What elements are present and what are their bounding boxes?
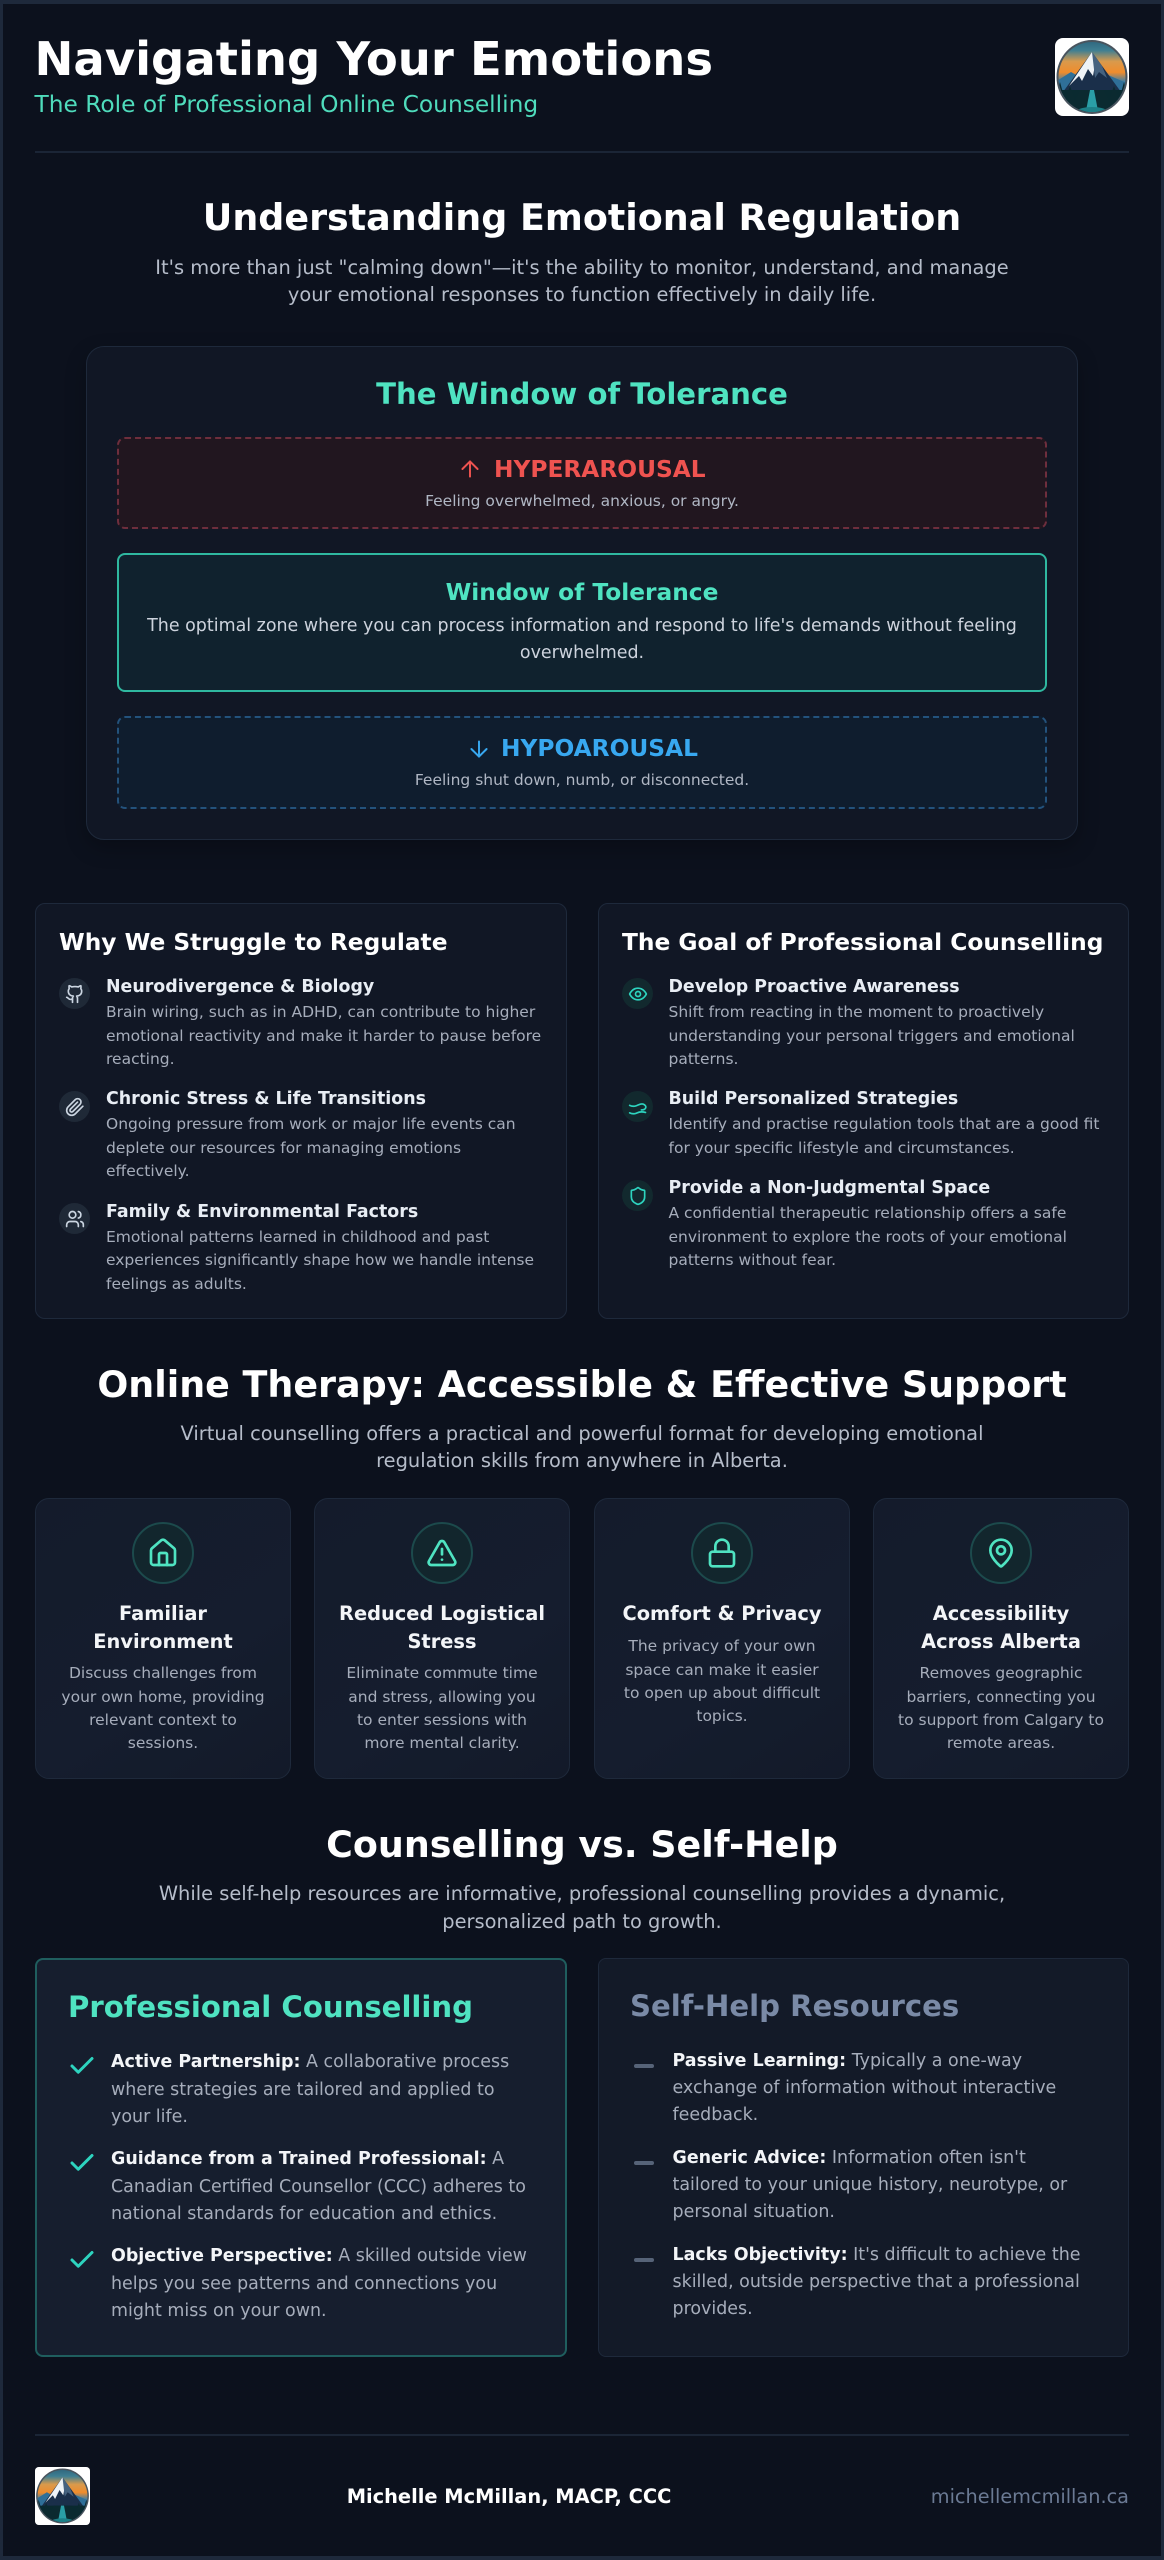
list item: trained professional	[111, 2149, 526, 2224]
card: familiar environment	[35, 1498, 291, 1779]
list item: lacks objectivity: provides.	[672, 2299, 753, 2319]
list item: active partnership	[111, 2052, 509, 2127]
list item: passive learning	[672, 2051, 1056, 2125]
list item: trained professional: Guidance from a Trained Professional: A	[111, 2149, 504, 2169]
item text: neurodivergence	[106, 1003, 541, 1068]
card text: comfort and privacy: space can make it easier	[625, 1661, 819, 1679]
item text: proactive awareness: understanding your personal triggers and emotional	[668, 1027, 1075, 1045]
footer: website: michellemcmillan.ca	[931, 2485, 1129, 2508]
text: comparison intro: personalized path to growth.	[442, 1910, 722, 1933]
heading: professional counselling: Professional Counselling	[68, 1990, 473, 2024]
card text: familiar environment: your own home, providing	[61, 1688, 265, 1706]
text: regulation intro: It's more than just "calming down"—it's the ability to monitor, understand, and manage	[155, 256, 1009, 278]
list item: passive learning: exchange of information without interactive	[672, 2078, 1056, 2098]
list item: generic advice: personal situation.	[672, 2202, 835, 2222]
card text: reduced logistical stress: and stress, allowing you	[348, 1688, 536, 1706]
card text: reduced logistical stress: Eliminate commute time	[346, 1664, 538, 1682]
item text: neurodivergence: Brain wiring, such as in ADHD, can contribute to higher	[106, 1003, 535, 1021]
zone: window of tolerance	[117, 553, 1047, 692]
text: regulation intro: your emotional responses to function effectively in daily life.	[288, 283, 876, 306]
list item: passive learning: Passive Learning: Typically a one-way	[672, 2051, 1022, 2071]
card: comfort and privacy	[594, 1498, 850, 1779]
icon: dash 2	[634, 2160, 654, 2164]
panel: goal of professional counselling	[598, 903, 1129, 1319]
icon: arrow down	[470, 740, 488, 758]
icon: dash 3	[634, 2258, 654, 2262]
item title: family factors: Family & Environmental Factors	[106, 1202, 418, 1222]
list item: lacks objectivity: skilled, outside perspective that a professional	[672, 2272, 1080, 2292]
panel: professional counselling	[35, 1958, 567, 2357]
text: window description	[147, 616, 1017, 663]
item text: non-judgmental space: patterns without fear.	[668, 1251, 836, 1269]
card text: familiar environment: Discuss challenges from	[69, 1664, 257, 1682]
card text: comfort and privacy: to open up about difficult	[624, 1684, 820, 1702]
card text: comfort and privacy: The privacy of your own	[628, 1637, 816, 1655]
item text: non-judgmental space: A confidential therapeutic relationship offers a safe	[668, 1204, 1066, 1222]
card title: familiar environment: Familiar	[119, 1602, 207, 1625]
item text: proactive awareness: patterns.	[668, 1050, 738, 1068]
card text: familiar environment: relevant context to	[89, 1711, 237, 1729]
list item: objective perspective: helps you see patterns and connections you	[111, 2274, 497, 2294]
list item: objective perspective: Objective Perspective: A skilled outside view	[111, 2246, 527, 2266]
list item: objective perspective	[111, 2246, 527, 2321]
item text: personalized strategies	[668, 1115, 1100, 1157]
card: reduced logistical stress	[314, 1498, 570, 1779]
text: regulation intro	[155, 256, 1009, 306]
list item: trained professional: Canadian Certified Counsellor (CCC) adheres to	[111, 2177, 526, 2197]
text: online therapy intro	[180, 1422, 983, 1472]
icon: waves	[622, 1091, 653, 1122]
list item: trained professional: national standards for education and ethics.	[111, 2204, 497, 2224]
item title: personalized strategies: Build Personalized Strategies	[668, 1089, 958, 1109]
list item: active partnership: where strategies are tailored and applied to	[111, 2080, 495, 2100]
card text: familiar environment	[61, 1664, 265, 1752]
item text: neurodivergence: reacting.	[106, 1050, 175, 1068]
icon: paperclip	[59, 1091, 90, 1122]
icon: alert triangle	[411, 1522, 473, 1584]
card title: reduced logistical stress: Reduced Logistical	[339, 1602, 545, 1625]
card title: reduced logistical stress	[339, 1602, 545, 1653]
card text: reduced logistical stress: to enter sessions with	[357, 1711, 527, 1729]
heading: self-help resources: Self-Help Resources	[630, 1989, 959, 2023]
text: window description: The optimal zone where you can process information and respond to life's demands without feeling	[147, 616, 1017, 636]
list item: lacks objectivity: Lacks Objectivity: It's difficult to achieve the	[672, 2245, 1080, 2265]
card title: comfort and privacy: Comfort & Privacy	[622, 1602, 822, 1625]
item text: family factors: feelings as adults.	[106, 1275, 247, 1293]
icon: arrow up	[461, 460, 479, 478]
heading: counselling vs self-help: Counselling vs. Self-Help	[326, 1822, 838, 1866]
panel: why we struggle	[35, 903, 567, 1319]
heading: understanding emotional regulation: Understanding Emotional Regulation	[203, 196, 961, 239]
card text: comfort and privacy: topics.	[696, 1707, 748, 1725]
card title: accessibility across alberta: Accessibility	[933, 1602, 1069, 1625]
item text: neurodivergence: emotional reactivity and make it harder to pause before	[106, 1027, 541, 1045]
item text: non-judgmental space: environment to explore the roots of your emotional	[668, 1228, 1067, 1246]
text: hypoarousal description: Feeling shut down, numb, or disconnected.	[415, 771, 749, 789]
heading: the window of tolerance: The Window of Tolerance	[376, 377, 788, 411]
text: online therapy intro: regulation skills from anywhere in Alberta.	[376, 1449, 788, 1472]
item title: neurodivergence: Neurodivergence & Biology	[106, 977, 374, 997]
card title: familiar environment	[93, 1602, 233, 1653]
card text: accessibility across alberta: to support from Calgary to	[898, 1711, 1104, 1729]
card text: accessibility across alberta	[898, 1664, 1104, 1752]
item text: non-judgmental space	[668, 1204, 1067, 1269]
icon: mountain logo	[1055, 38, 1129, 116]
list item: generic advice: tailored to your unique history, neurotype, or	[672, 2175, 1067, 2195]
item text: chronic stress: effectively.	[106, 1162, 190, 1180]
text: hyperarousal description: Feeling overwhelmed, anxious, or angry.	[425, 492, 739, 510]
heading: why we struggle: Why We Struggle to Regulate	[59, 929, 448, 956]
list item: active partnership: Active Partnership: A collaborative process	[111, 2052, 509, 2072]
list item: lacks objectivity	[672, 2245, 1080, 2319]
list item: active partnership: your life.	[111, 2107, 188, 2127]
panel: window of tolerance	[86, 346, 1078, 840]
icon: map pin	[970, 1522, 1032, 1584]
icon: footer logo	[35, 2467, 90, 2525]
panel: self-help resources	[598, 1958, 1129, 2357]
item title: chronic stress: Chronic Stress & Life Transitions	[106, 1089, 426, 1109]
card text: accessibility across alberta: Removes geographic	[920, 1664, 1082, 1682]
icon: eye	[622, 978, 653, 1009]
item text: family factors: experiences significantly shape how we handle intense	[106, 1251, 534, 1269]
icon: dash 1	[634, 2064, 654, 2068]
icon: check 1	[70, 2056, 94, 2074]
heading: goal of counselling: The Goal of Professional Counselling	[622, 929, 1103, 956]
zone: hypoarousal	[117, 716, 1047, 809]
card title: reduced logistical stress: Stress	[407, 1630, 477, 1653]
icon: check 3	[70, 2250, 94, 2268]
text: comparison intro: While self-help resources are informative, professional counselling provides a dynamic,	[159, 1882, 1005, 1905]
list item: objective perspective: might miss on your own.	[111, 2301, 327, 2321]
item text: chronic stress	[106, 1115, 516, 1180]
text: online therapy intro: Virtual counselling offers a practical and powerful format for developing emotional	[181, 1422, 983, 1445]
label: hyperarousal: HYPERAROUSAL	[494, 456, 706, 483]
zone: hyperarousal	[117, 437, 1047, 529]
heading: online therapy: Online Therapy: Accessible & Effective Support	[97, 1362, 1067, 1406]
card: accessibility across alberta	[873, 1498, 1129, 1779]
card text: accessibility across alberta: barriers, connecting you	[906, 1688, 1096, 1706]
card title: accessibility across alberta: Across Alberta	[921, 1630, 1081, 1653]
list item: passive learning: feedback.	[672, 2105, 758, 2125]
title: Navigating Your Emotions	[34, 32, 713, 86]
subtitle: The Role of Professional Online Counselling	[34, 91, 538, 118]
list item: generic advice	[672, 2148, 1068, 2222]
icon: check 2	[70, 2154, 94, 2171]
item text: proactive awareness	[668, 1003, 1075, 1068]
text: comparison intro	[159, 1882, 1005, 1933]
item title: proactive awareness: Develop Proactive Awareness	[668, 977, 960, 997]
card title: familiar environment: Environment	[93, 1630, 233, 1653]
item title: non-judgmental space: Provide a Non-Judgmental Space	[668, 1178, 990, 1198]
icon: home	[132, 1522, 194, 1584]
list item: generic advice: Generic Advice: Information often isn't	[672, 2148, 1026, 2168]
card text: reduced logistical stress: more mental clarity.	[364, 1734, 520, 1752]
card text: comfort and privacy	[624, 1637, 820, 1725]
icon: shield	[622, 1180, 653, 1211]
card text: familiar environment: sessions.	[128, 1734, 198, 1752]
icon: lock	[691, 1522, 753, 1584]
footer: author name: Michelle McMillan, MACP, CCC	[347, 2485, 671, 2508]
label: window of tolerance: Window of Tolerance	[446, 579, 718, 606]
card title: accessibility across alberta	[921, 1602, 1081, 1653]
item text: personalized strategies: for your specific lifestyle and circumstances.	[668, 1139, 1015, 1157]
item text: proactive awareness: Shift from reacting in the moment to proactively	[668, 1003, 1044, 1021]
item text: personalized strategies: Identify and practise regulation tools that are a good fit	[668, 1115, 1099, 1133]
icon: users	[59, 1203, 90, 1234]
label: hypoarousal: HYPOAROUSAL	[501, 735, 698, 762]
item text: chronic stress: Ongoing pressure from work or major life events can	[106, 1115, 516, 1133]
item text: family factors	[106, 1228, 534, 1293]
card text: accessibility across alberta: remote areas.	[947, 1734, 1055, 1752]
card text: reduced logistical stress	[346, 1664, 538, 1752]
item text: chronic stress: deplete our resources for managing emotions	[106, 1139, 461, 1157]
item text: family factors: Emotional patterns learned in childhood and past	[106, 1228, 489, 1246]
icon: github	[59, 978, 90, 1009]
text: window description: overwhelmed.	[520, 643, 644, 663]
